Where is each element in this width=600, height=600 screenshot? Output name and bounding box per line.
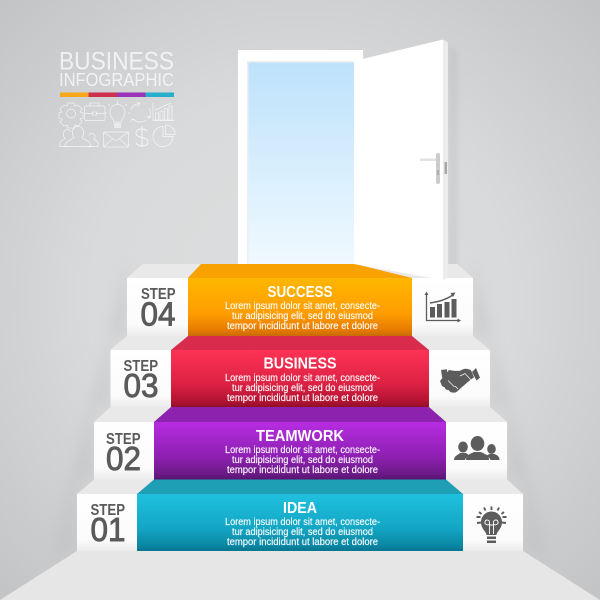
icon: light bulb: [476, 506, 506, 543]
label: 01: [90, 511, 126, 548]
label: STEP: [90, 502, 125, 519]
stair step 03: [110, 336, 490, 407]
door edge shadow: [448, 44, 458, 272]
text: Lorem ipsum dolor sit amet, consecte-: [225, 517, 380, 528]
icon: light bulb: [105, 101, 130, 128]
door: [238, 50, 363, 265]
open door leaf: [354, 40, 448, 280]
icon: bar chart: [153, 103, 174, 120]
icon: gear: [59, 103, 83, 128]
door handle: [420, 153, 447, 184]
text: tur adipisicing elit, sed do eiusmod: [232, 455, 373, 466]
white front: [127, 278, 473, 336]
door panel: [354, 40, 443, 280]
text: [225, 500, 380, 548]
door frame: [238, 50, 363, 264]
tread: [77, 480, 523, 494]
text: [225, 284, 380, 332]
text: tur adipisicing elit, sed do eiusmod: [232, 383, 373, 394]
text: tempor incididunt ut labore et dolore: [227, 465, 378, 476]
label: STEP: [106, 431, 140, 448]
text: [225, 428, 380, 476]
icon: cycle arrows: [131, 102, 151, 122]
label: STEP: [141, 286, 176, 303]
stair step 02: [94, 407, 507, 480]
tread: [94, 407, 507, 422]
icon: people: [454, 436, 500, 460]
text: SUCCESS: [268, 284, 333, 301]
icon: handshake: [440, 368, 480, 393]
colour tread: [188, 264, 412, 278]
text: BUSINESS: [264, 356, 337, 372]
white front: [94, 422, 507, 480]
text: tur adipisicing elit, sed do eiusmod: [232, 311, 373, 322]
door edge: [443, 40, 448, 280]
white front: [110, 350, 490, 407]
text: tempor incididunt ut labore et dolore: [227, 321, 378, 332]
icon: envelope: [104, 132, 128, 147]
text: [225, 356, 380, 404]
label: 02: [106, 440, 141, 477]
text: tempor incididunt ut labore et dolore: [227, 393, 378, 404]
label: STEP: [124, 358, 158, 375]
text: Lorem ipsum dolor sit amet, consecte-: [225, 445, 380, 456]
text: TEAMWORK: [256, 428, 344, 445]
text: Lorem ipsum dolor sit amet, consecte-: [225, 373, 380, 384]
heading: business infographic: [59, 48, 174, 90]
door opening sky: [248, 62, 355, 265]
colour tread: [154, 407, 446, 422]
tread: [110, 336, 490, 350]
colour front: [188, 278, 412, 336]
colour front: [171, 350, 429, 407]
text: tempor incididunt ut labore et dolore: [227, 537, 378, 548]
icon: pie chart: [153, 125, 175, 146]
colour front: [137, 494, 463, 551]
colour tread: [137, 480, 463, 494]
colour tread: [171, 336, 429, 350]
header line icons: [59, 101, 175, 147]
icon: briefcase: [84, 103, 105, 120]
white front: [77, 494, 523, 551]
icon: people: [60, 126, 98, 146]
icon: growth chart: [424, 292, 461, 322]
colour front: [154, 422, 446, 480]
stair step 01: [77, 480, 523, 551]
floor: [0, 551, 600, 600]
wall shadow beside stairs: [50, 264, 550, 560]
text: Lorem ipsum dolor sit amet, consecte-: [225, 301, 380, 312]
heading: business infographic: INFOGRAPHIC: [59, 69, 174, 90]
text: tur adipisicing elit, sed do eiusmod: [232, 527, 373, 538]
stair step 04: [127, 264, 473, 336]
label: 03: [124, 367, 158, 404]
tread: [127, 264, 473, 278]
icon: dollar: [136, 126, 148, 147]
colour bar: [60, 92, 174, 97]
heading: business infographic: BUSINESS: [59, 48, 174, 76]
text: IDEA: [283, 500, 317, 517]
label: 04: [140, 296, 176, 332]
